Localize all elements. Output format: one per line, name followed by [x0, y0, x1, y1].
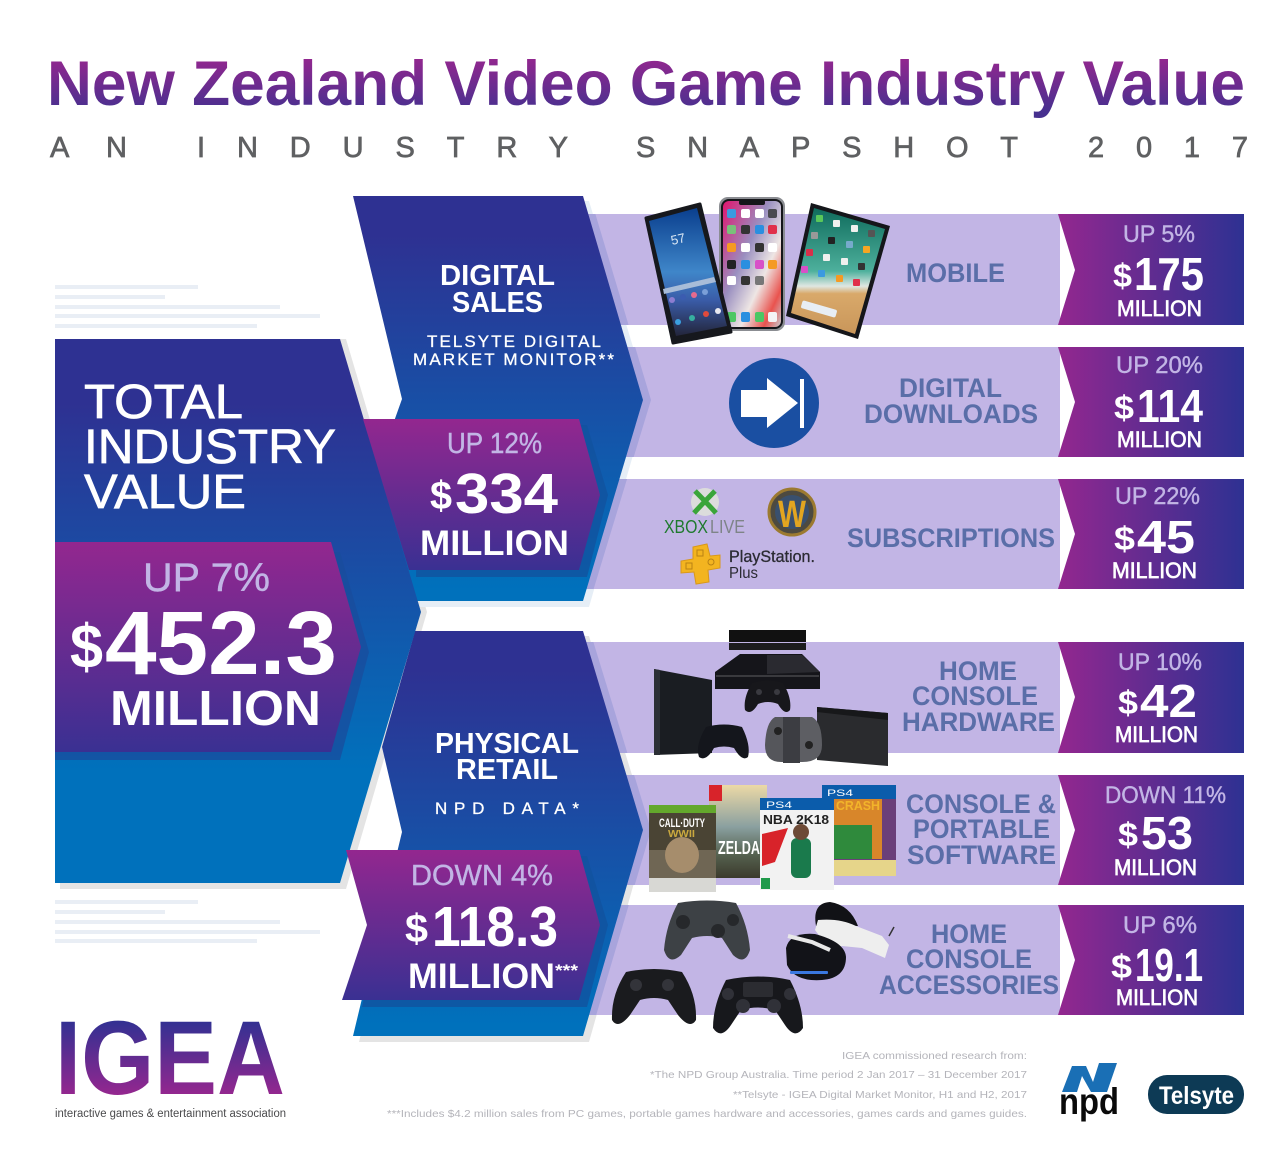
logo: IGEA: interactive games & entertainment association	[55, 1108, 286, 1120]
value: digital downloads: $	[1114, 389, 1134, 426]
icon: playstation plus logo	[681, 544, 815, 584]
footnotes: IGEA commissioned research from:	[842, 1050, 1027, 1062]
icon: xbox live logo: XBOX	[664, 517, 708, 537]
icon: mobile phones	[646, 197, 890, 343]
callout: total value: 452.3	[105, 594, 337, 694]
value: home console hardware: UP 10%	[1118, 649, 1202, 676]
logo: npd	[1059, 1063, 1119, 1122]
value: home console accessories: 19.1	[1135, 939, 1203, 991]
label: home console accessories: CONSOLE	[906, 944, 1032, 974]
icon: playstation plus logo: Plus	[729, 565, 758, 582]
digital sales heading: DIGITAL	[440, 260, 555, 292]
value: home console hardware	[1058, 642, 1244, 753]
value: console and portable software	[1058, 775, 1244, 885]
label: home console hardware: CONSOLE	[912, 681, 1038, 711]
icon: game boxes: WWII	[668, 829, 695, 840]
callout: total value: UP 7%	[143, 556, 270, 600]
value: home console accessories	[1058, 905, 1244, 1015]
icon: game boxes: PS4	[766, 800, 792, 810]
callout: digital sales value: 334	[455, 462, 558, 526]
value: console and portable software: DOWN 11%	[1105, 782, 1226, 809]
label: console and portable software	[906, 789, 1056, 870]
logo: Telsyte: Telsyte	[1159, 1082, 1234, 1110]
value: digital downloads: MILLION	[1117, 427, 1202, 452]
icon: xbox live logo: LIVE	[710, 517, 745, 537]
total heading: INDUSTRY	[84, 421, 336, 474]
shadows of blocks	[60, 201, 649, 1042]
physical retail heading: PHYSICAL	[435, 728, 579, 760]
footnotes	[387, 1050, 1027, 1120]
value: home console accessories: MILLION	[1116, 985, 1198, 1010]
callout: physical retail value: MILLION	[408, 957, 555, 996]
digital sales source: MARKET MONITOR**	[413, 350, 614, 369]
icon: game boxes: CALL·DUTY	[659, 816, 705, 830]
value: subscriptions: 45	[1137, 511, 1195, 563]
callout: digital sales value	[363, 419, 608, 577]
logo: IGEA: IGEA	[55, 1000, 285, 1117]
icon: xbox live logo	[664, 488, 745, 537]
label: subscriptions: SUBSCRIPTIONS	[847, 523, 1055, 553]
callout: digital sales value: UP 12%	[447, 428, 542, 460]
label: console and portable software: SOFTWARE	[907, 840, 1056, 870]
physical retail source: NPD DATA*	[435, 799, 579, 818]
logo: npd: npd	[1059, 1081, 1119, 1122]
callout: total value: $	[70, 613, 103, 682]
digital sales source: TELSYTE DIGITAL	[427, 332, 601, 351]
callout: digital sales value: $	[430, 474, 452, 518]
label: home console hardware: HOME	[939, 656, 1017, 686]
callout: total value	[55, 542, 369, 760]
icon: game boxes	[649, 785, 896, 892]
value: home console hardware: $	[1118, 684, 1138, 721]
title: New Zealand Video Game Industry Value	[47, 49, 1245, 119]
total heading	[84, 376, 336, 519]
label: digital downloads: DIGITAL	[899, 373, 1002, 403]
icon: game boxes: CRASH	[836, 798, 880, 813]
label: console and portable software: PORTABLE	[913, 814, 1050, 844]
panel: physical retail block	[353, 631, 643, 1036]
label: home console accessories: HOME	[931, 919, 1007, 949]
footnotes: ***Includes $4.2 million sales from PC games, portable games hardware and accessories, games cards and games guides.	[387, 1108, 1027, 1120]
value: home console accessories: $	[1111, 948, 1132, 985]
value: digital downloads	[1058, 347, 1244, 457]
icon: game boxes: ZELDA	[718, 838, 760, 858]
icon: playstation plus logo: PlayStation.	[729, 547, 815, 566]
value: digital downloads: UP 20%	[1116, 352, 1203, 379]
panel: digital sales block	[330, 196, 643, 601]
lavender category bars	[560, 214, 1060, 1015]
icon: world of warcraft emblem: W	[778, 494, 806, 536]
total heading: VALUE	[84, 466, 246, 519]
callout: physical retail value: ***	[555, 961, 578, 980]
icon: digital download arrow	[729, 358, 819, 448]
label: mobile: MOBILE	[906, 258, 1005, 288]
label: digital downloads	[864, 373, 1038, 429]
subtitle	[50, 132, 1248, 164]
value: subscriptions: MILLION	[1112, 558, 1197, 583]
subtitle: SNAPSHOT	[636, 132, 1018, 164]
digital sales heading: SALES	[452, 287, 543, 319]
physical retail heading: RETAIL	[456, 754, 558, 786]
icon: game boxes: NBA 2K18	[763, 812, 829, 827]
value: mobile: $	[1113, 257, 1132, 294]
digital sales heading	[440, 260, 555, 319]
callout: physical retail value: 118.3	[432, 895, 558, 959]
value: subscriptions	[1058, 479, 1244, 589]
subtitle: INDUSTRY	[197, 132, 568, 164]
icon: mobile phones: 57	[669, 230, 687, 248]
value: home console accessories: UP 6%	[1123, 912, 1197, 939]
label: console and portable software: CONSOLE &	[906, 789, 1056, 819]
value: digital downloads: 114	[1137, 380, 1203, 432]
panel: total industry value block	[55, 339, 421, 883]
icon: controllers and vr headset	[612, 900, 894, 1033]
logo: Telsyte	[1148, 1075, 1244, 1114]
total heading: TOTAL	[84, 376, 243, 429]
label: home console hardware: HARDWARE	[902, 707, 1055, 737]
value: home console hardware: 42	[1140, 675, 1197, 727]
value: console and portable software: MILLION	[1114, 855, 1197, 880]
icon: game boxes: PS4	[827, 788, 853, 798]
value: home console hardware: MILLION	[1115, 722, 1198, 747]
physical retail heading	[435, 728, 579, 786]
label: home console accessories	[879, 919, 1059, 1000]
value: mobile: MILLION	[1117, 296, 1202, 321]
label: home console accessories: ACCESSORIES	[879, 970, 1059, 1000]
label: home console hardware	[902, 656, 1055, 737]
icon: home consoles	[654, 630, 888, 766]
callout: digital sales value: MILLION	[420, 524, 569, 563]
value: mobile: UP 5%	[1123, 221, 1195, 248]
callout: physical retail value: $	[405, 907, 428, 951]
digital sales source	[413, 332, 614, 369]
label: digital downloads: DOWNLOADS	[864, 399, 1038, 429]
value: subscriptions: $	[1114, 520, 1135, 557]
subtitle: 2017	[1088, 132, 1248, 164]
subtitle: AN	[50, 132, 127, 164]
icon: world of warcraft emblem	[768, 488, 816, 536]
callout: total value: MILLION	[110, 682, 321, 736]
footnotes: **Telsyte - IGEA Digital Market Monitor, H1 and H2, 2017	[733, 1089, 1027, 1101]
value: subscriptions: UP 22%	[1115, 483, 1200, 510]
value: mobile: 175	[1134, 248, 1204, 300]
value: console and portable software: $	[1118, 816, 1138, 853]
footnotes: *The NPD Group Australia. Time period 2 Jan 2017 – 31 December 2017	[650, 1069, 1027, 1081]
value: mobile	[1058, 214, 1244, 325]
value: console and portable software: 53	[1141, 807, 1193, 859]
callout: physical retail value: DOWN 4%	[411, 860, 553, 892]
callout: physical retail value	[342, 850, 608, 1007]
